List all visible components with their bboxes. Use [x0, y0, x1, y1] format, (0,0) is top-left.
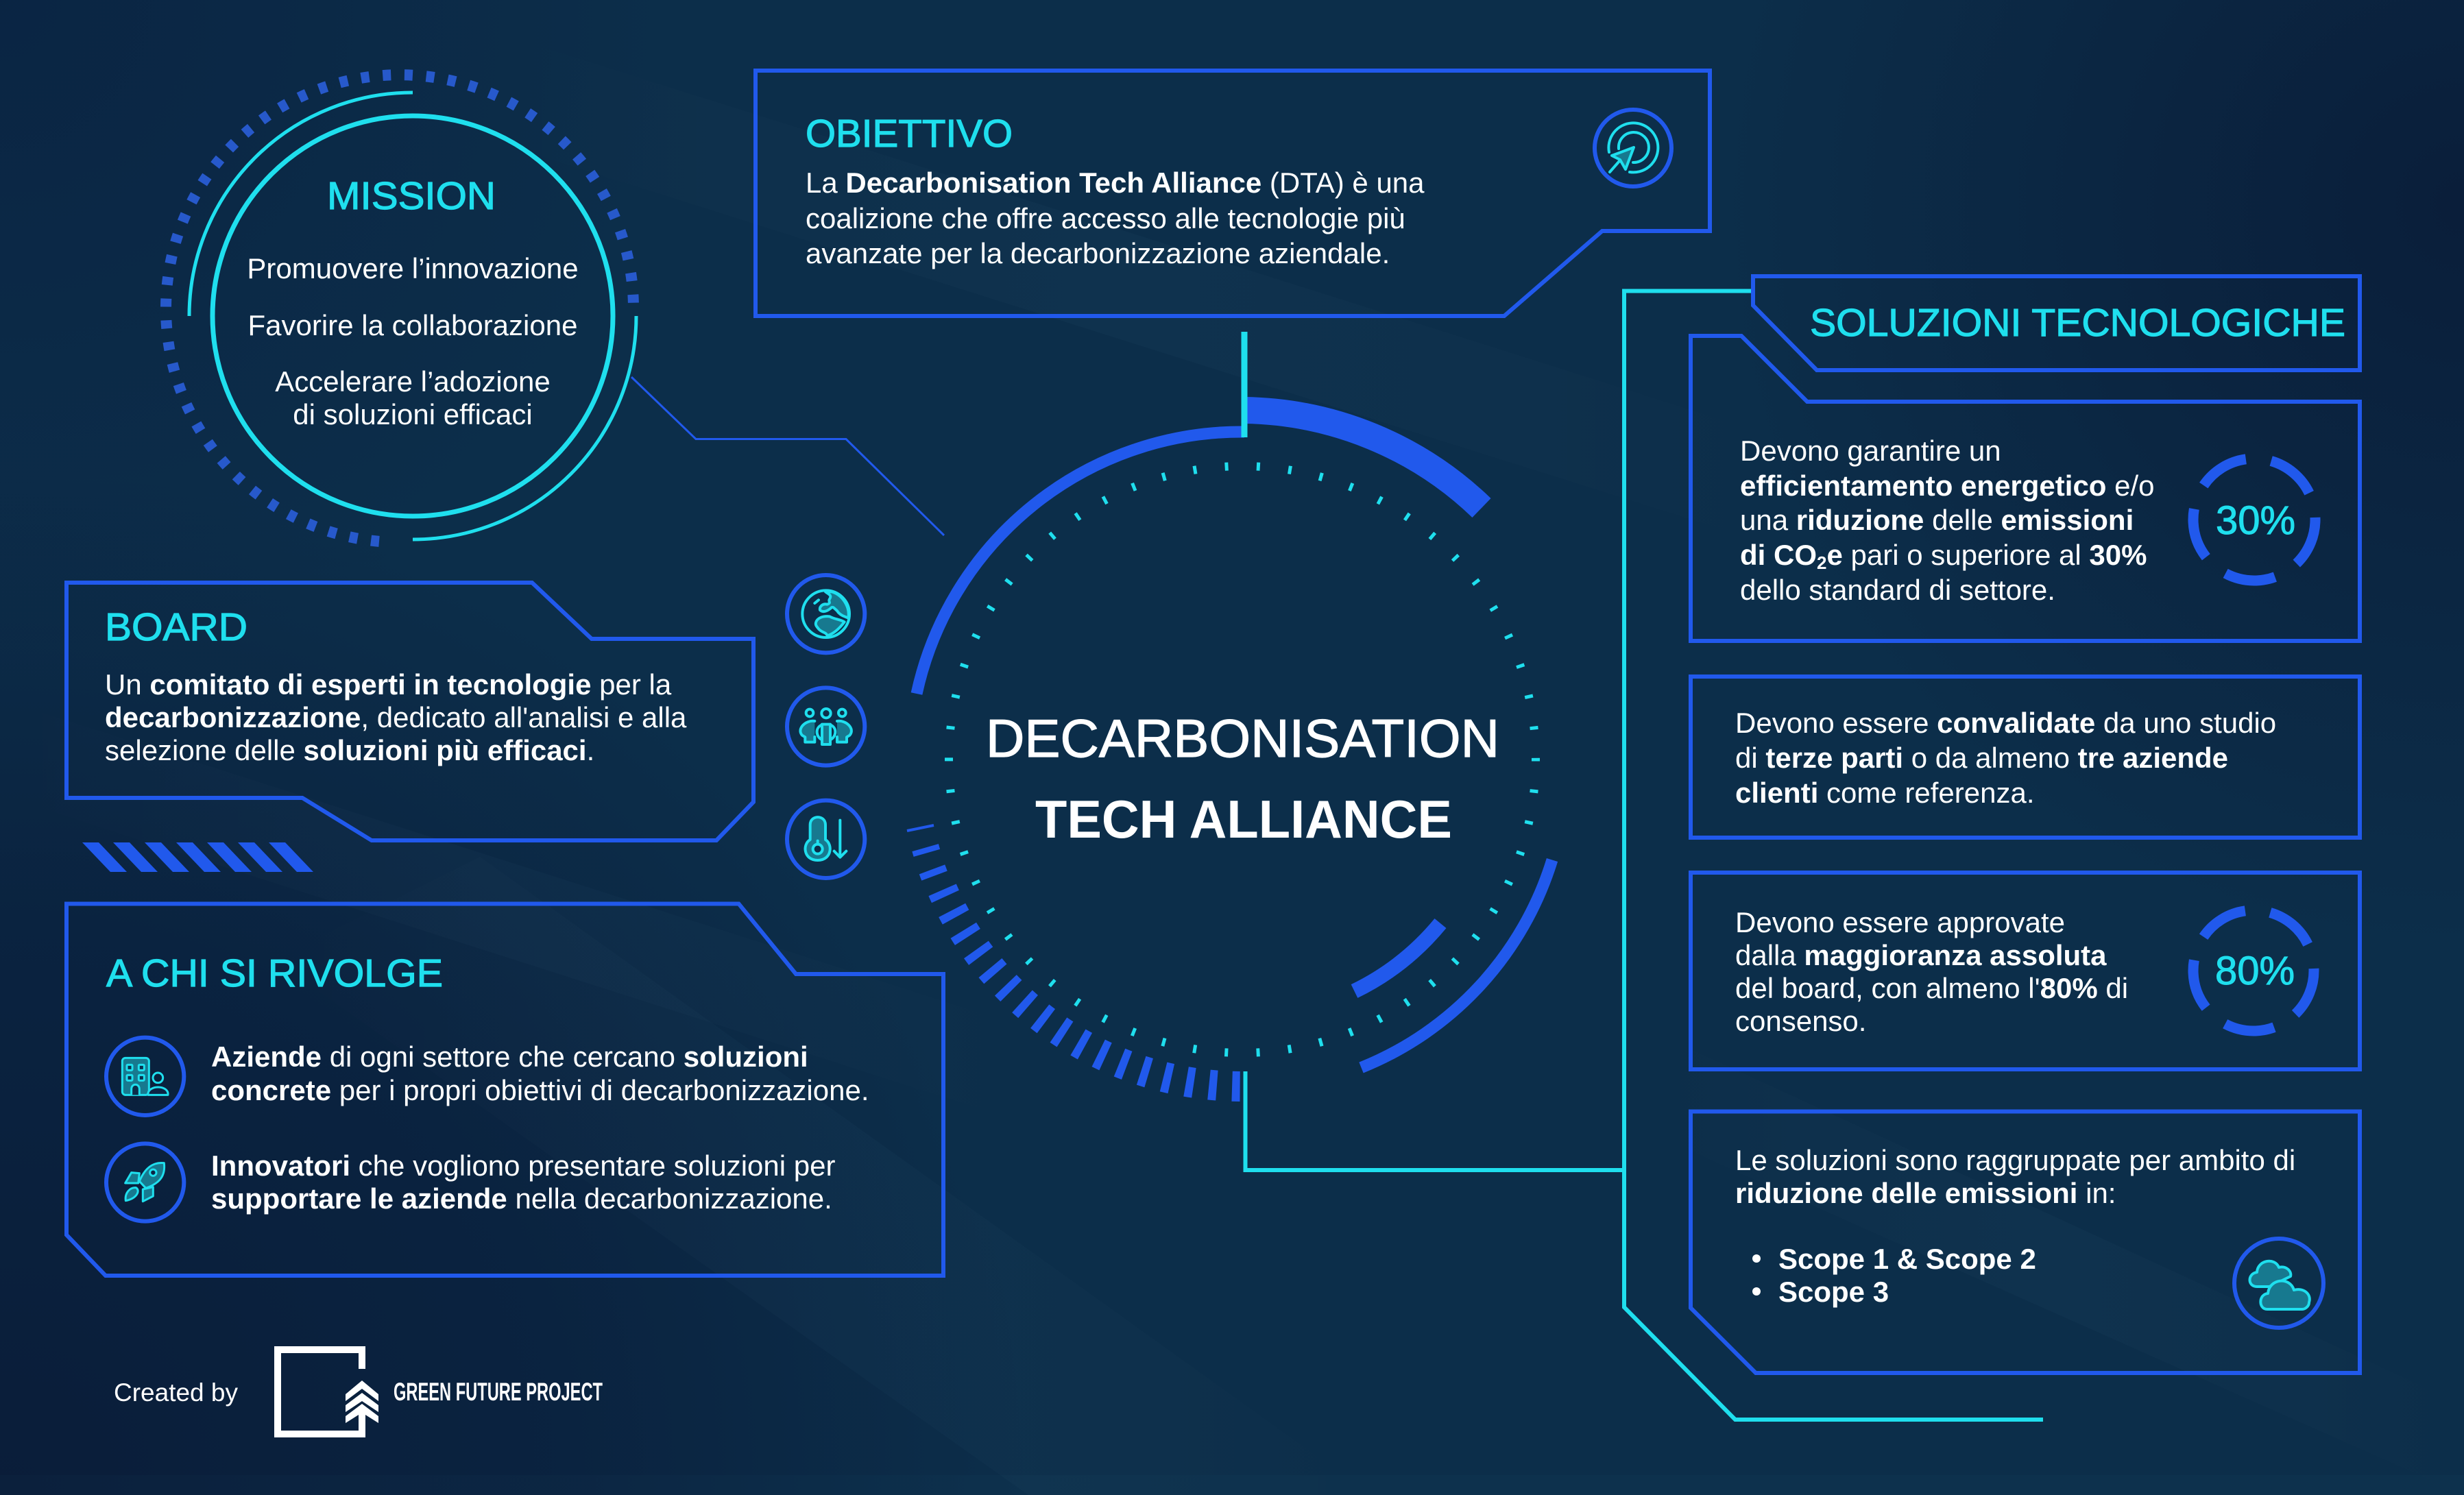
gauge 80%: 80%: [2215, 949, 2295, 993]
icon: thermometer: [787, 801, 865, 878]
board outline: [67, 583, 753, 840]
audience text: companies: [211, 1041, 869, 1106]
mission inner circle: [213, 116, 613, 516]
panel: soluzioni tecnologiche header: [1753, 276, 2360, 370]
short arc lower right: [1355, 923, 1440, 991]
board text: selezione delle soluzioni più efficaci.: [105, 734, 594, 766]
card text: Le soluzioni sono raggruppate per ambito di: [1735, 1144, 2295, 1176]
board heading: BOARD: [105, 605, 247, 649]
mission text: Accelerare l’adozione: [275, 365, 551, 398]
panel: obiettivo: [756, 71, 1710, 316]
audience heading: A CHI SI RIVOLGE: [106, 951, 443, 995]
card outline: [1691, 1112, 2360, 1373]
title: [986, 708, 1499, 849]
card text: [1735, 906, 2128, 1037]
card text: [1735, 1144, 2295, 1209]
obiettivo text: avanzate per la decarbonizzazione aziendale.: [806, 237, 1390, 269]
board text: decarbonizzazione, dedicato all'analisi e alla: [105, 701, 687, 733]
mission outer arcs: [189, 93, 636, 539]
title: TECH ALLIANCE: [1035, 789, 1452, 849]
credit: created by: [114, 1350, 603, 1434]
panel: a chi si rivolge: [67, 903, 943, 1276]
audience text: innovators: [211, 1150, 835, 1215]
card text: Devono essere approvate: [1735, 906, 2065, 938]
radial bars lower left: [907, 825, 1240, 1086]
audience text: companies: concrete per i propri obiettivi di decarbonizzazione.: [211, 1074, 869, 1106]
scope list: [1752, 1243, 2036, 1308]
gauge 30%: 30%: [2216, 498, 2295, 543]
audience text: companies: Aziende di ogni settore che cercano soluzioni: [211, 1041, 808, 1073]
connector: mission to centre: [631, 377, 944, 535]
card: scopes: [1691, 1112, 2360, 1373]
card text: riduzione delle emissioni in:: [1735, 1177, 2116, 1209]
audience outline: [67, 903, 943, 1276]
title: DECARBONISATION: [986, 708, 1499, 768]
panel: mission: [166, 75, 636, 542]
mission heading: MISSION: [327, 174, 496, 218]
thick arc upper right: [1244, 410, 1482, 508]
obiettivo text: coalizione che offre accesso alle tecnologie più: [806, 202, 1405, 234]
card text: clienti come referenza.: [1735, 777, 2035, 809]
card text: [1735, 707, 2276, 809]
mission text: di soluzioni efficaci: [293, 398, 533, 430]
card outline: [1691, 336, 2360, 641]
audience text: innovators: Innovatori che vogliono presentare soluzioni per: [211, 1150, 835, 1182]
mission text: [247, 252, 579, 430]
card text: Devono garantire un: [1740, 435, 2001, 467]
board text: Un comitato di esperti in tecnologie per la: [105, 668, 672, 701]
connector: solutions frame: [1624, 291, 2043, 1420]
created by label: Created by: [114, 1378, 238, 1407]
panel: board: [67, 583, 753, 840]
central dial: [907, 332, 1552, 1086]
logo wordmark: GREEN FUTURE PROJECT: [394, 1378, 603, 1406]
card text: consenso.: [1735, 1005, 1866, 1037]
card text: e: [1826, 539, 1843, 571]
header outline: [1753, 276, 2360, 370]
card text: [1740, 435, 2155, 606]
mission dotted ring: [166, 75, 633, 542]
icon: people: [787, 688, 865, 766]
obiettivo text: [806, 167, 1425, 269]
card text: efficientamento energetico e/o: [1740, 470, 2155, 502]
card text: dalla maggioranza assoluta: [1735, 939, 2107, 971]
thin arc upper left: [917, 432, 1244, 694]
connector: centre to solutions: [1245, 1071, 1624, 1170]
icon: clouds: [2234, 1239, 2323, 1328]
card text: di terze parti o da almeno tre aziende: [1735, 742, 2228, 774]
icon: target: [1595, 110, 1671, 186]
board text: [105, 668, 687, 766]
thin arc lower right: [1362, 860, 1552, 1068]
decorative stripes: [82, 842, 313, 872]
card: validation: [1691, 677, 2360, 838]
card outline: [1691, 677, 2360, 838]
logo tree: [346, 1381, 378, 1426]
mission text: Favorire la collaborazione: [248, 309, 577, 341]
scope list: Scope 3: [1778, 1276, 1889, 1308]
obiettivo heading: OBIETTIVO: [806, 112, 1013, 156]
audience text: innovators: supportare le aziende nella decarbonizzazione.: [211, 1182, 832, 1215]
card text: del board, con almeno l'80% di: [1735, 972, 2128, 1004]
card text: dello standard di settore.: [1740, 574, 2055, 606]
vertical marker: [1241, 332, 1248, 437]
icon: rocket: [106, 1143, 184, 1221]
card text: 2: [1817, 552, 1826, 573]
scope list: Scope 1 & Scope 2: [1778, 1243, 2036, 1275]
header text: SOLUZIONI TECNOLOGICHE: [1810, 301, 2345, 345]
card text: Devono essere convalidate da uno studio: [1735, 707, 2276, 739]
tick ring: [949, 466, 1536, 1053]
obiettivo text: La Decarbonisation Tech Alliance (DTA) è una: [806, 167, 1425, 199]
logo frame: [278, 1350, 362, 1434]
card: efficiency: [1691, 336, 2360, 641]
card text: pari o superiore al 30%: [1850, 539, 2147, 571]
gauge 30%: [2191, 457, 2317, 583]
mission text: Promuovere l’innovazione: [247, 252, 579, 284]
card outline: [1691, 873, 2360, 1069]
gauge 80%: [2191, 908, 2316, 1033]
card text: una riduzione delle emissioni: [1740, 504, 2134, 536]
obiettivo outline: [756, 71, 1710, 316]
card: approval: [1691, 873, 2360, 1069]
card text: di CO: [1740, 539, 1843, 573]
icon: building and person: [106, 1038, 184, 1115]
icon: globe: [787, 575, 865, 653]
